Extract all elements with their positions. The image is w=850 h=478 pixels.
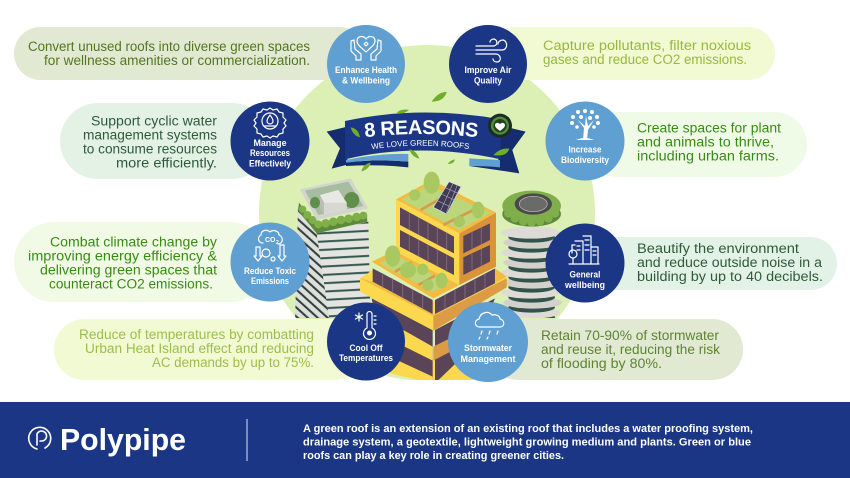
- pill: create spaces: including urban farms.: [637, 148, 779, 164]
- solar panel: [433, 182, 461, 214]
- circle: improve air: [449, 25, 527, 103]
- footer band: [0, 402, 850, 478]
- pill: retain stormwater: of flooding by 80%.: [541, 356, 662, 371]
- circle: enhance health: Enhance Health: [335, 65, 397, 75]
- pill: combat climate: delivering green spaces that: [40, 262, 217, 278]
- circle: manage resources: Effectively: [249, 158, 291, 168]
- circle: manage resources: [230, 102, 310, 180]
- pill: convert roofs: Convert unused roofs into diverse green spaces: [28, 39, 310, 54]
- pill: capture pollutants: Capture pollutants, filter noxious: [543, 38, 751, 53]
- banner: 8 reasons: [326, 92, 526, 174]
- pill: support water: more efficiently.: [116, 156, 217, 171]
- pill: retain stormwater: [488, 319, 743, 380]
- central yellow building: [360, 172, 507, 383]
- circle: reduce toxic: [230, 222, 310, 302]
- circle: stormwater: Management: [460, 354, 516, 364]
- circle: improve air: Quality: [474, 76, 502, 86]
- pill: support water: to consume resources: [83, 142, 217, 157]
- pill: beautify: [585, 237, 837, 290]
- circle: cool off: Cool Off: [350, 343, 383, 353]
- pill: retain stormwater: and reuse it, reducing the risk: [541, 342, 720, 357]
- circle: reduce toxic: 2: [276, 240, 279, 246]
- circle: manage resources: Resources: [250, 148, 290, 158]
- banner: 8 reasons: 8 REASONS: [364, 120, 478, 137]
- pill: beautify: building by up to 40 decibels.: [637, 269, 823, 284]
- pill: reduce temperatures: [54, 319, 366, 380]
- pill: reduce temperatures: Reduce of temperatures by combatting: [79, 327, 314, 342]
- circle: cool off: [327, 302, 405, 380]
- pill: combat climate: improving energy efficiency &: [28, 248, 217, 264]
- logo: Polypipe: Polypipe: [60, 422, 186, 457]
- pill: convert roofs: [14, 27, 366, 80]
- pill: support water: management systems: [83, 128, 217, 143]
- circle: general wellbeing: General: [570, 270, 600, 280]
- pill: beautify: and reduce outside noise in a: [637, 255, 823, 270]
- pill: combat climate: Combat climate change by: [50, 235, 217, 250]
- circle: general wellbeing: wellbeing: [564, 280, 605, 290]
- circle: increase biodiversity: Increase: [568, 144, 602, 154]
- pill: capture pollutants: gases and reduce CO2 emissions.: [543, 52, 747, 67]
- circle: enhance health: [327, 25, 405, 103]
- pill: retain stormwater: Retain 70-90% of stormwater: [541, 328, 720, 343]
- circle: enhance health: & Wellbeing: [342, 76, 390, 86]
- icon: heart badge: [488, 114, 512, 138]
- circle: reduce toxic: CO: [265, 237, 276, 244]
- circle: cool off: Temperatures: [339, 353, 393, 363]
- pill: reduce temperatures: AC demands by up to 75%.: [152, 355, 314, 370]
- green circle backdrop: [259, 45, 595, 381]
- circle: increase biodiversity: Biodiversity: [561, 155, 609, 165]
- footer description: roofs can play a key role in creating greener cities.: [303, 450, 564, 462]
- circle: reduce toxic: Emissions: [251, 276, 289, 286]
- pill: support water: Support cyclic water: [91, 114, 218, 129]
- footer description: A green roof is an extension of an existing roof that includes a water proofing system,: [303, 423, 753, 435]
- footer description: drainage system, a geotextile, lightweight growing medium and plants. Green or blue: [303, 436, 751, 448]
- pill: combat climate: counteract CO2 emissions.: [49, 276, 213, 292]
- pill: combat climate: [14, 222, 270, 302]
- banner: 8 reasons: WE LOVE GREEN ROOFS: [370, 140, 470, 149]
- circle: improve air: Improve Air: [464, 65, 512, 75]
- pill: support water: [60, 103, 270, 179]
- pill: beautify: Beautify the environment: [637, 241, 799, 256]
- footer description: [303, 423, 753, 462]
- pill: create spaces: and animals to thrive,: [637, 134, 774, 150]
- circle: general wellbeing: [546, 224, 624, 302]
- circle: increase biodiversity: [546, 102, 624, 180]
- pill: capture pollutants: [488, 27, 775, 80]
- circle: manage resources: Manage: [254, 138, 286, 148]
- left striped building: [295, 178, 371, 323]
- circle: stormwater: [448, 302, 528, 382]
- pill: create spaces: [585, 112, 807, 177]
- circle: reduce toxic: Reduce Toxic: [244, 266, 296, 276]
- pill: create spaces: Create spaces for plant: [637, 121, 781, 136]
- circle: stormwater: Stormwater: [464, 343, 512, 353]
- pill: convert roofs: for wellness amenities or commercialization.: [44, 53, 310, 68]
- pill: reduce temperatures: Urban Heat Island effect and reducing: [85, 341, 314, 356]
- right cylinder building: [501, 191, 562, 323]
- icon: leaves: [351, 92, 509, 171]
